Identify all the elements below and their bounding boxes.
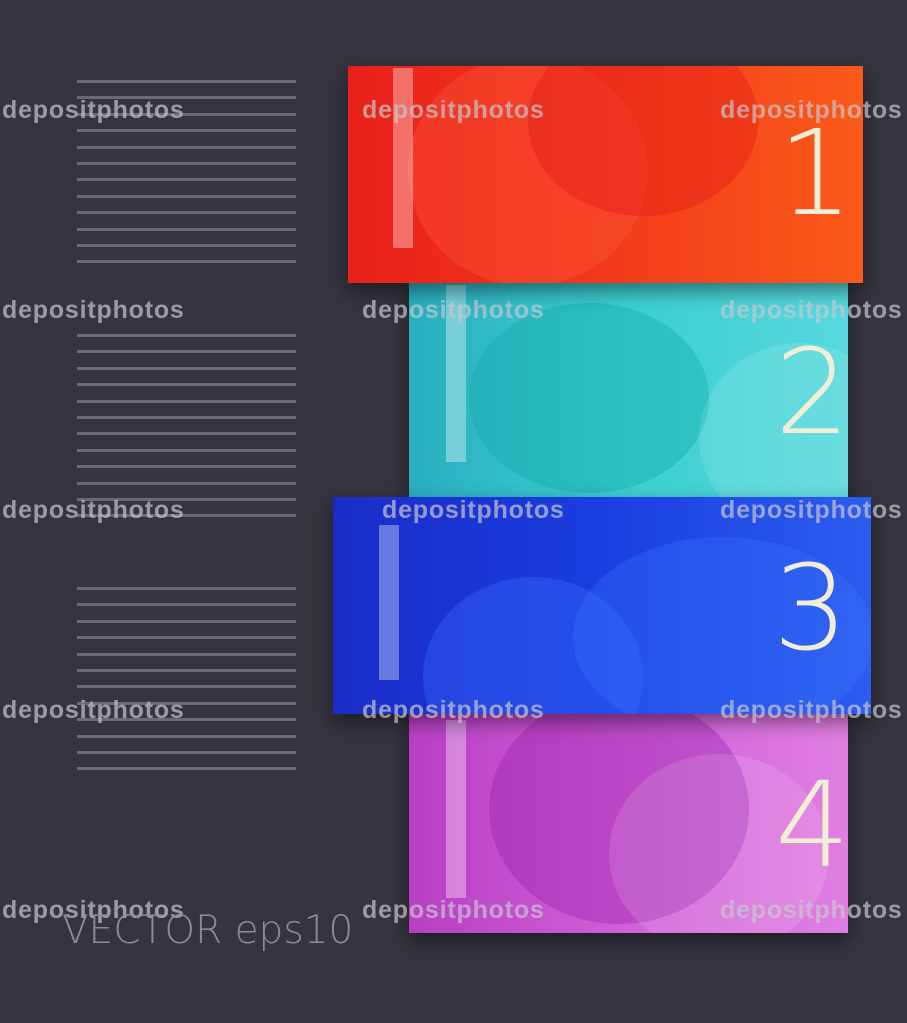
watermarks: depositphotos xyxy=(362,696,545,724)
watermarks: depositphotos xyxy=(720,496,903,524)
watermarks: depositphotos xyxy=(720,296,903,324)
number 1: 1 xyxy=(778,104,853,242)
bar 3 xyxy=(379,525,399,680)
text lines group 2 xyxy=(77,334,296,517)
watermarks: depositphotos xyxy=(2,696,185,724)
watermarks: depositphotos xyxy=(2,96,185,124)
watermarks: depositphotos xyxy=(720,696,903,724)
bar 4 xyxy=(446,720,466,898)
card 2 teal xyxy=(409,283,848,497)
bar 2 xyxy=(446,285,466,462)
caption: VECTOR eps10: VECTOR eps10 xyxy=(62,908,353,953)
watermarks: depositphotos xyxy=(362,96,545,124)
watermarks: depositphotos xyxy=(720,96,903,124)
watermarks: depositphotos xyxy=(2,896,185,924)
number 4: 4 xyxy=(775,756,848,894)
number 3: 3 xyxy=(773,539,848,677)
watermarks: depositphotos xyxy=(382,496,565,524)
watermarks: depositphotos xyxy=(2,496,185,524)
card 4 magenta xyxy=(409,714,848,933)
watermarks: depositphotos xyxy=(362,896,545,924)
watermarks: depositphotos xyxy=(2,296,185,324)
watermarks: depositphotos xyxy=(362,296,545,324)
text lines group 3 xyxy=(77,587,296,770)
bar 1 xyxy=(393,68,413,248)
watermarks: depositphotos xyxy=(720,896,903,924)
card 3 blue xyxy=(333,497,871,714)
number 2: 2 xyxy=(775,323,848,461)
card 1 red xyxy=(348,66,863,283)
text lines group 1 xyxy=(77,80,296,263)
